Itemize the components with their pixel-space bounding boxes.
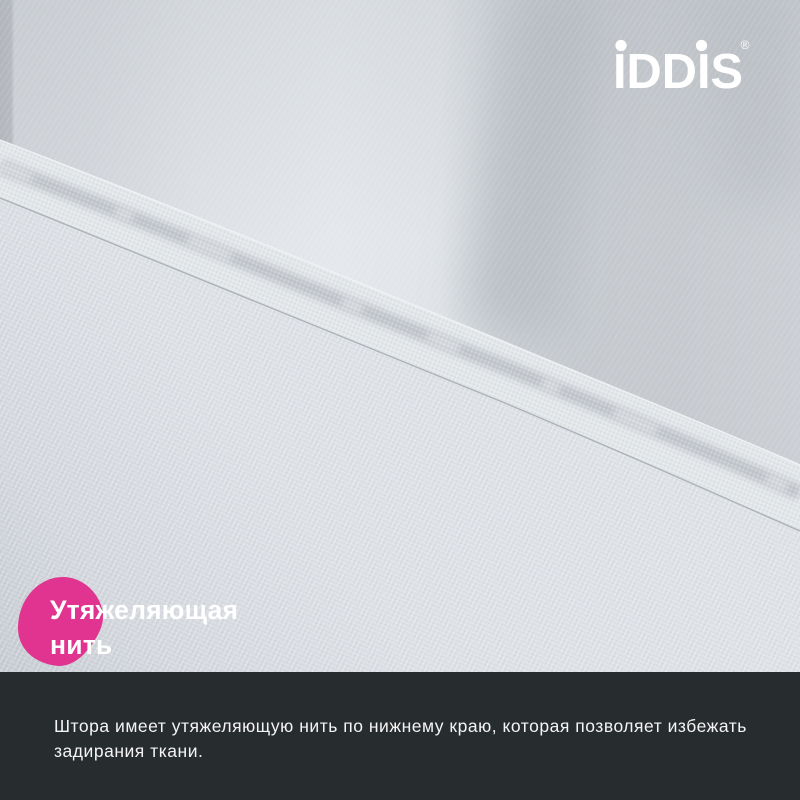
bottom band — [0, 672, 800, 800]
logo: IDDIS: ® — [741, 38, 750, 52]
pink blob — [18, 577, 103, 666]
description text: Штора имеет утяжеляющую нить по нижнему краю, которая позволяет избежать — [54, 716, 747, 736]
description text — [54, 716, 747, 761]
heading — [50, 595, 238, 660]
heading: нить — [50, 630, 112, 660]
description text: задирания ткани. — [54, 741, 203, 761]
logo: IDDIS: IDDIS — [613, 45, 743, 99]
heading: Утяжеляющая — [50, 595, 238, 625]
lower fabric panel — [0, 197, 800, 672]
hem with weighted thread — [0, 140, 800, 531]
